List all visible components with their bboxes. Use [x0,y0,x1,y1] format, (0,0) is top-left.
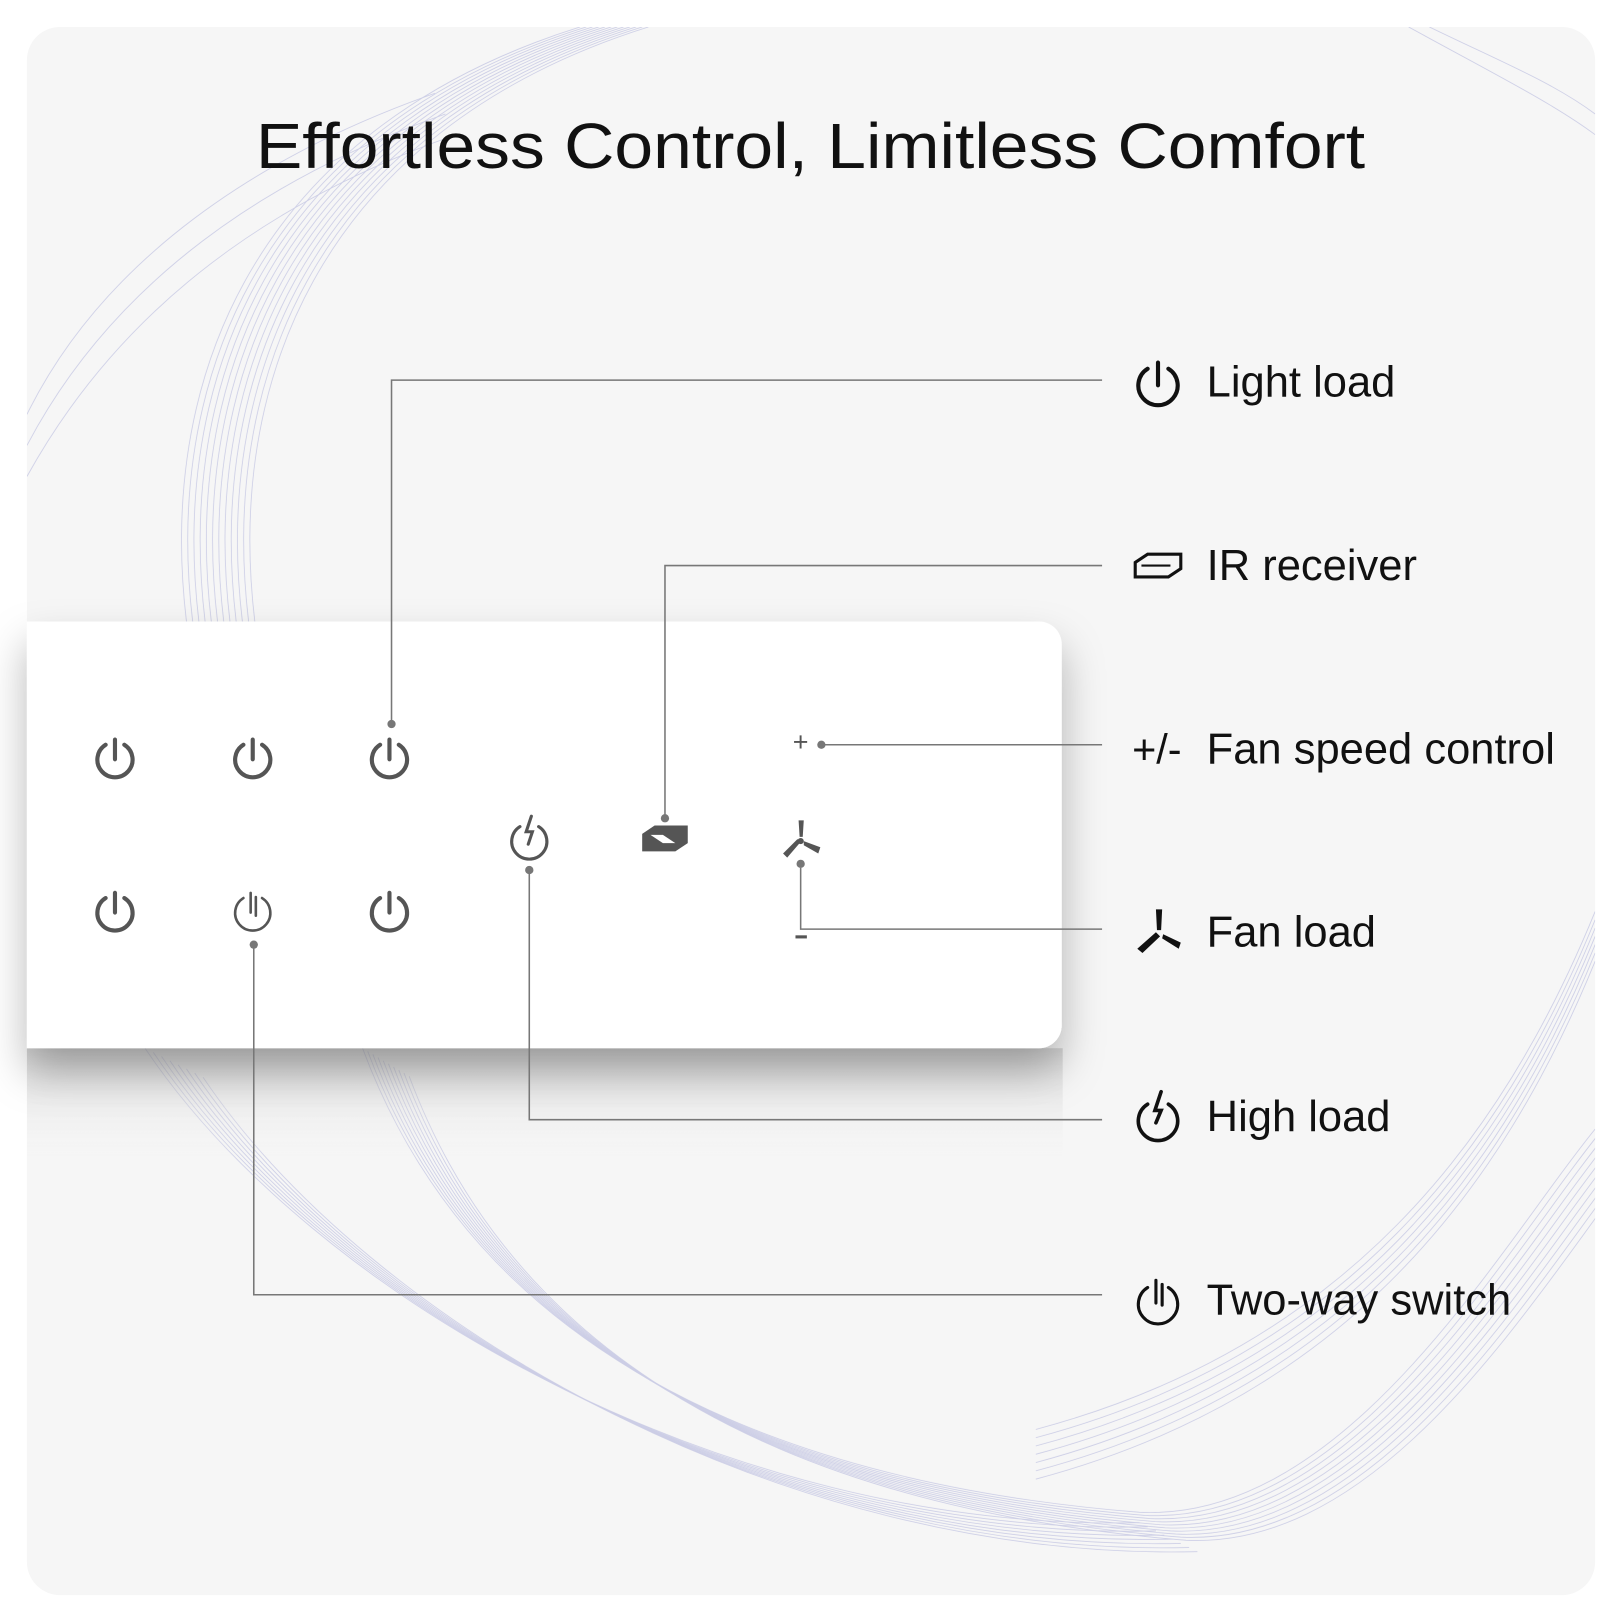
legend: fan speed: Fan speed control [1207,725,1555,773]
legend: IR receiver: IR receiver [1207,542,1417,590]
legend: two-way switch: Two-way switch [1207,1276,1511,1324]
leader lines [254,380,1102,1295]
icon: IR receiver [642,826,688,851]
legend: light load: Light load [1207,359,1395,407]
plus / minus: + [793,727,809,757]
control panel [27,621,1063,1162]
title: Effortless Control, Limitless Comfort [256,110,1365,182]
icon: fan [783,820,820,858]
legend [1132,359,1555,1324]
icon: light load switches [97,740,547,931]
legend: fan load: Fan load [1207,909,1376,957]
legend: high load: High load [1207,1093,1390,1141]
legend: fan speed: +/- [1132,725,1182,772]
